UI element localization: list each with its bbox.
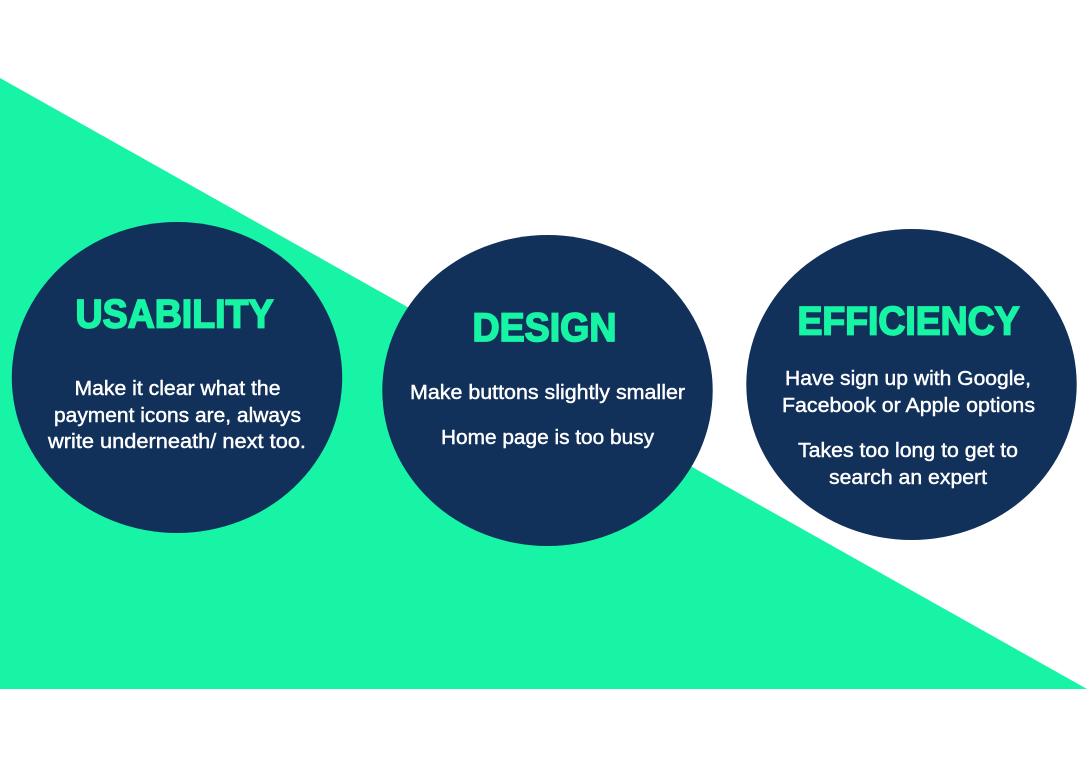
text block: design notes: Make buttons slightly smaller	[410, 381, 685, 404]
text block: usability notes: Make it clear what the	[74, 377, 280, 400]
heading: efficiency: EFFICIENCY	[798, 300, 1020, 344]
panel: usability	[12, 222, 342, 533]
panel: design	[382, 235, 713, 546]
circle: usability	[12, 222, 342, 533]
text block: efficiency notes: search an expert	[829, 466, 987, 489]
text block: usability notes: write underneath/ next too.	[47, 430, 306, 453]
text block: design notes	[410, 381, 685, 449]
heading: design: DESIGN	[472, 306, 616, 350]
text block: efficiency notes	[782, 367, 1035, 489]
background triangle	[0, 78, 1087, 689]
panel: efficiency	[746, 229, 1077, 540]
heading: usability: USABILITY	[76, 292, 274, 336]
text block: design notes: Home page is too busy	[441, 426, 655, 449]
text block: usability notes: payment icons are, always	[54, 404, 301, 427]
circle: efficiency	[746, 229, 1077, 540]
text block: efficiency notes: Have sign up with Google,	[785, 367, 1031, 390]
text block: usability notes	[47, 377, 306, 453]
text block: efficiency notes: Takes too long to get to	[798, 439, 1018, 462]
text block: efficiency notes: Facebook or Apple options	[782, 394, 1035, 417]
circle: design	[382, 235, 713, 546]
